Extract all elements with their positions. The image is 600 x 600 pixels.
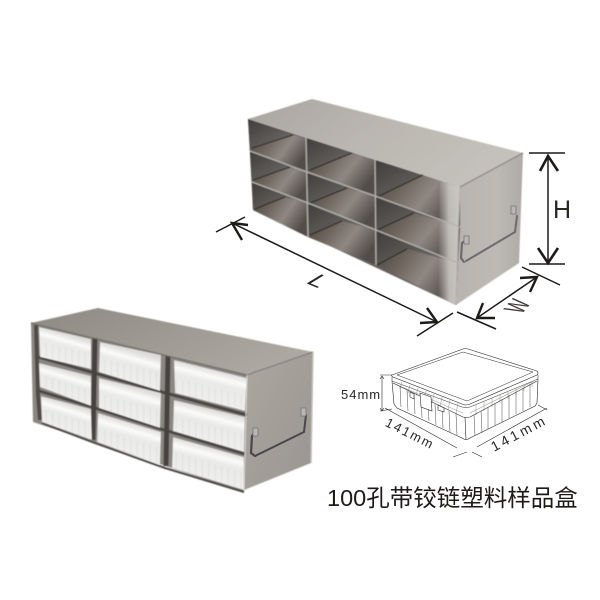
box hinge: [410, 392, 444, 412]
right side ribs: [474, 384, 530, 436]
loaded stainless steel rack: [31, 308, 313, 492]
label H: H: [553, 196, 571, 224]
box lid: [392, 348, 538, 405]
dimension line right width: [472, 405, 547, 457]
box grid insert: [395, 380, 536, 415]
caption: 100孔带铰链塑料样品盒: [327, 485, 578, 511]
dimension L arrow: [216, 217, 453, 336]
dimension H arrow: [529, 153, 565, 264]
loaded rack handle: [251, 408, 306, 456]
rack handle: [461, 206, 517, 262]
rack front compartments: [248, 119, 523, 305]
label L: L: [300, 271, 337, 291]
label 54mm: 54mm: [341, 387, 381, 402]
loaded rack side panel: [244, 352, 313, 490]
left side ribs: [400, 386, 457, 435]
rack side panel: [456, 153, 523, 305]
label W: W: [497, 296, 538, 316]
label 141mm left: 141mm: [383, 415, 437, 452]
dimension line height: [380, 375, 392, 411]
loaded rack top panel: [31, 308, 313, 375]
plastic box line drawing: [380, 348, 547, 457]
dimension line left width: [385, 408, 467, 457]
label 141mm right: 141mm: [488, 411, 550, 455]
empty stainless steel rack with dimensions: [216, 99, 571, 336]
plastic storage boxes: [39, 327, 247, 490]
box base: [392, 379, 538, 440]
loaded rack front frame: [31, 323, 313, 492]
dimension W arrow: [457, 267, 560, 329]
rack top panel: [248, 99, 523, 187]
